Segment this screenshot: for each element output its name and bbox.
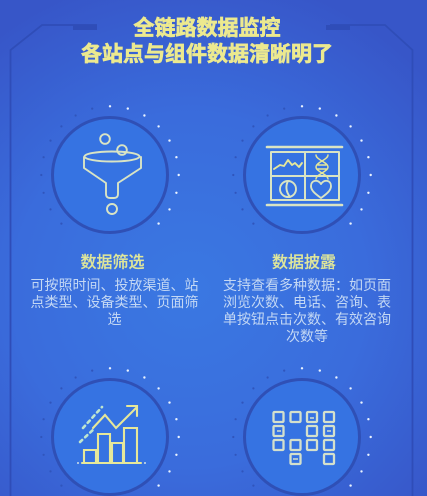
dotted ring bbox=[232, 105, 372, 225]
description bbox=[223, 277, 391, 344]
icon: square grid bbox=[274, 412, 334, 464]
description: 次数等 bbox=[286, 328, 328, 344]
title bbox=[81, 16, 333, 66]
description: 选 bbox=[108, 311, 122, 327]
icon: dashboard bbox=[267, 147, 342, 205]
description: 单按钮点击次数、有效咨询 bbox=[223, 311, 391, 327]
dotted ring bbox=[40, 105, 180, 225]
description bbox=[30, 277, 198, 327]
title: 全链路数据监控 bbox=[134, 16, 280, 40]
panel: component grid bbox=[232, 367, 372, 494]
circle bbox=[52, 380, 168, 494]
circle bbox=[244, 380, 360, 494]
panel: trend chart bbox=[40, 367, 180, 494]
heading: 数据筛选 bbox=[80, 252, 145, 272]
description: 浏览次数、电话、咨询、表 bbox=[223, 294, 391, 310]
panel: data disclosure bbox=[223, 105, 391, 344]
description: 支持查看多种数据：如页面 bbox=[223, 277, 391, 293]
description: 可按照时间、投放渠道、站 bbox=[30, 277, 198, 293]
dotted ring bbox=[232, 367, 372, 487]
description: 点类型、设备类型、页面筛 bbox=[30, 294, 198, 310]
dotted ring bbox=[40, 367, 180, 487]
icon: funnel bbox=[84, 134, 141, 214]
icon: bar chart with arrow bbox=[77, 406, 146, 464]
heading: 数据披露 bbox=[272, 254, 336, 272]
circle bbox=[244, 118, 360, 232]
circle bbox=[52, 118, 168, 232]
panel: data filter bbox=[30, 105, 198, 327]
title: 各站点与组件数据清晰明了 bbox=[81, 42, 333, 66]
